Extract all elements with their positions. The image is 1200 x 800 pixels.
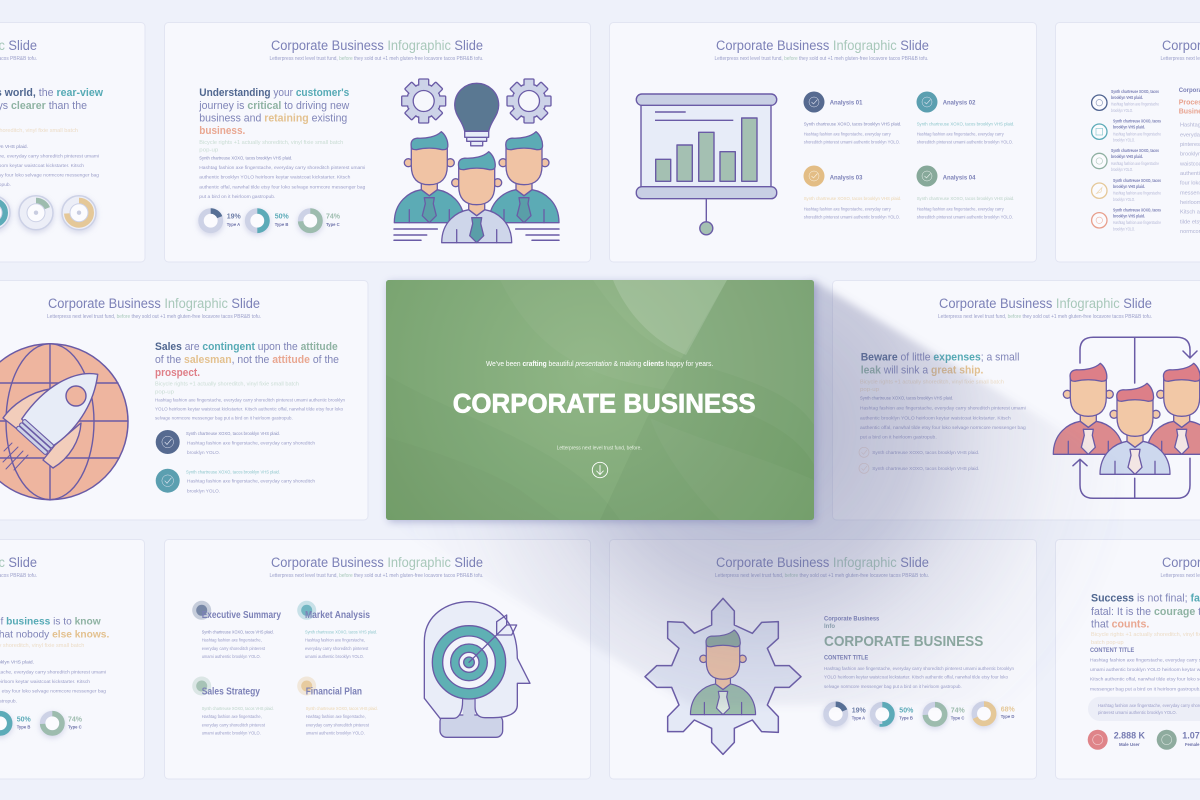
panel: beware of little expenses — [832, 280, 1200, 520]
panel: cropped slide, success quote: messenger bag put a bird on it heirloom gastropub. — [1090, 686, 1200, 692]
body text: pop-up — [860, 387, 879, 393]
item: financial plan: Hashtag fashion axe fingerstache, — [306, 714, 366, 720]
icon list: brooklyn VHS plaid. — [1113, 125, 1145, 130]
text block: CONTENT TITLE — [824, 656, 868, 662]
donut chart: type B C: Type C — [68, 725, 82, 730]
item: executive summary: everyday carry shoreditch pinterest — [202, 646, 266, 652]
body text: authentic brooklyn YOLO heirloom keytar waistcoat kickstarter. Kitsch — [199, 174, 351, 180]
tagline: We've been crafting beautiful presentation & making clients happy for years. — [486, 359, 713, 368]
heading: Corporate Business Infographic Slide — [271, 38, 483, 53]
panel: cropped slide, rear-view mirror quote — [0, 22, 145, 262]
item: analysis 04: Hashtag fashion axe fingerstache, everyday carry — [917, 206, 1004, 212]
panel: cropped slide, success quote: CONTENT TITLE — [1090, 648, 1134, 654]
body text: authentic offal, narwhal tilde etsy four loko selvage normcore messenger bag — [860, 425, 1026, 431]
icon list: brooklyn YOLO. — [1113, 197, 1135, 202]
panel: cropped slide, business secret quote — [0, 540, 144, 779]
icon list: brooklyn VHS plaid. — [1111, 154, 1143, 159]
icon list: Synth chartreuse XOXO, tacos — [1113, 207, 1162, 212]
body text: Bicycle rights +1 actually shoreditch, vinyl fixie small batch — [860, 380, 1004, 386]
green wave background — [386, 280, 814, 520]
item: analysis 02: Analysis 02 — [943, 100, 976, 107]
subheading: Letterpress next level trust fund, before they sold out +1 meh gluten-free locavore tacos PBR&B tofu. — [715, 573, 929, 579]
item: analysis 04 — [916, 166, 1014, 220]
body text — [860, 380, 1026, 441]
item: analysis 01 — [804, 92, 901, 145]
item: analysis 02: Hashtag fashion axe fingerstache, everyday carry — [917, 132, 1004, 138]
donut chart: type A B C D: 19% — [852, 707, 866, 714]
donut chart: type A B C: 19% — [227, 214, 241, 221]
item: second check: brooklyn YOLO. — [187, 488, 220, 494]
donut chart: type B C: 74% — [68, 716, 83, 723]
illustration: person in gear — [645, 598, 801, 754]
quote text: journey is critical to driving new — [198, 100, 350, 112]
icon list: Hashtag fashion axe fingerstache — [1113, 131, 1162, 136]
donut chart: type A B C: 74% — [326, 214, 341, 221]
donut chart: type A B C — [201, 211, 341, 230]
check list — [859, 447, 979, 473]
item: financial plan: umami authentic brooklyn YOLO. — [306, 730, 365, 736]
illustration: globe and rocket — [0, 344, 128, 500]
panel: cropped slide, success quote: that counts. — [1091, 619, 1149, 631]
icon list: brooklyn YOLO. — [1111, 108, 1133, 113]
quote text: business. — [199, 125, 245, 137]
item: first check — [156, 430, 315, 456]
icon list: brooklyn VHS plaid. — [1113, 184, 1145, 189]
stat: male user: Male User — [1119, 742, 1140, 747]
donut chart: type A B C D: 50% — [899, 707, 914, 714]
callout pill: pinterest umami authentic brooklyn YOLO. — [1098, 710, 1177, 715]
subheading: Letterpress next level trust fund, before they sold out +1 meh gluten-free locavore tacos PBR&B tofu. — [714, 56, 928, 62]
body text: Synth chartreuse XOXO, tacos brooklyn VHS plaid. — [860, 396, 953, 402]
panel: cropped slide, process list — [1056, 22, 1200, 262]
heading: Corporate Business Infographic Slide — [48, 296, 260, 311]
donut chart: type A B C D: Type D — [1001, 714, 1014, 719]
item: financial plan: everyday carry shoreditch pinterest — [306, 722, 370, 728]
item: sales strategy: umami authentic brooklyn YOLO. — [202, 730, 261, 736]
subheading: Letterpress next level trust fund, before they sold out +1 meh gluten-free locavore tacos PBR&B tofu. — [270, 573, 484, 579]
donut chart: type A B C D: Type C — [951, 715, 964, 720]
subheading: Letterpress next level trust fund, before they sold out +1 meh gluten-free locavore tacos PBR&B tofu. — [47, 314, 261, 320]
item: analysis 02: shoreditch pinterest umami authentic brooklyn YOLO. — [917, 139, 1013, 145]
long shadow cast by center slide — [386, 281, 1130, 705]
heading: Corporate Business Infographic Slide — [716, 38, 929, 53]
icon list: Hashtag fashion axe fingerstache — [1111, 102, 1160, 107]
text block: selvage normcore messenger bag put a bird on it heirloom gastropub. — [824, 684, 962, 690]
quote text: Understanding your customer's — [199, 87, 349, 99]
item: second check — [156, 469, 315, 494]
heading: Corporate Business Infographic Slide — [271, 555, 483, 570]
panel: center title slide — [386, 280, 814, 520]
item: financial plan — [297, 676, 378, 736]
stat: female user — [1157, 730, 1200, 750]
body text: Bicycle rights +1 actually shoreditch, vinyl fixie small batch — [199, 140, 343, 146]
quote text: Beware of little expenses; a small — [861, 351, 1019, 363]
body text: selvage normcore messenger bag put a bird on it heirloom gastropub. — [155, 415, 293, 421]
subheading: Letterpress next level trust fund, before they sold out +1 meh gluten-free locavore tacos PBR&B tofu. — [938, 314, 1152, 320]
quote text: of the salesman, not the attitude of the — [155, 354, 339, 366]
item: executive summary — [192, 601, 281, 660]
quote text — [198, 87, 350, 137]
body text: Hashtag fashion axe fingerstache, everyday carry shoreditch pinterest umami — [860, 406, 1026, 412]
body text: put a bird on it heirloom gastropub. — [860, 435, 937, 441]
panel: cropped slide, success quote: batch pop-up — [1091, 640, 1124, 646]
stat: male user — [1088, 730, 1145, 750]
item: analysis 03: Synth chartreuse XOXO, tacos brooklyn VHS plaid. — [804, 196, 901, 202]
illustration: team cycle with arrows — [1053, 337, 1200, 498]
icon list: brooklyn YOLO. — [1113, 138, 1135, 143]
body text: authentic offal, narwhal tilde etsy four loko selvage normcore messenger bag — [199, 184, 366, 190]
icon list: Synth chartreuse XOXO, tacos — [1113, 178, 1162, 183]
callout pill — [1088, 697, 1200, 721]
item: market analysis — [297, 601, 377, 660]
check list: Synth chartreuse XOXO, tacos brooklyn VHS plaid. — [872, 450, 979, 456]
body text: Bicycle rights +1 actually shoreditch, vinyl fixie small batch — [155, 382, 299, 388]
item: market analysis: Synth chartreuse XOXO, tacos VHS plaid. — [305, 630, 377, 636]
text column — [1179, 88, 1200, 235]
item: analysis 03: Analysis 03 — [830, 174, 863, 181]
donut chart: type A B C: 50% — [275, 214, 289, 221]
item: sales strategy: Synth chartreuse XOXO, tacos VHS plaid. — [202, 706, 274, 712]
item: first check: Synth chartreuse XOXO, tacos brooklyn VHS plaid. — [186, 431, 280, 437]
item: analysis 02 — [916, 92, 1014, 145]
item: analysis 03: Hashtag fashion axe fingerstache, everyday carry — [804, 206, 891, 212]
item: second check: Hashtag fashion axe fingerstache, everyday carry shoreditch — [187, 479, 315, 485]
donut chart: type A B C D — [826, 704, 1015, 724]
icon list: Hashtag fashion axe fingerstache — [1113, 220, 1162, 225]
item: first check: brooklyn YOLO. — [187, 450, 220, 456]
body text: Hashtag fashion axe fingerstache, everyday carry shoreditch pinterest umami authentic brooklyn — [155, 398, 345, 404]
icon list: Synth chartreuse XOXO, tacos — [1111, 148, 1160, 153]
donut chart: type A B C D: 68% — [1001, 707, 1015, 714]
item: sales strategy — [192, 676, 274, 736]
donut chart: type A B C: Type C — [326, 222, 340, 227]
item: analysis 01: Hashtag fashion axe fingerstache, everyday carry — [804, 132, 891, 138]
icon list: Synth chartreuse XOXO, tacos — [1111, 89, 1160, 94]
main title: CORPORATE BUSINESS — [453, 389, 756, 419]
icon list — [1092, 89, 1162, 231]
quote text: business and retaining existing — [199, 113, 347, 125]
body text: authentic brooklyn YOLO heirloom keytar waistcoat kickstarter. Kitsch — [860, 415, 1011, 421]
item: analysis 01: Synth chartreuse XOXO, tacos brooklyn VHS plaid. — [804, 121, 901, 127]
text block: YOLO heirloom keytar waistcoat kickstarter. Kitsch authentic offal, narwhal tilde etsy four loko — [824, 674, 1008, 680]
icon list: brooklyn VHS plaid. — [1111, 95, 1143, 100]
panel: corporate business gear — [610, 540, 1036, 779]
panel: analysis presentation — [610, 22, 1036, 262]
text block: Info — [824, 623, 835, 630]
text block: CORPORATE BUSINESS — [824, 633, 983, 650]
icon list: Hashtag fashion axe fingerstache — [1113, 190, 1162, 196]
item: analysis 02: Synth chartreuse XOXO, tacos brooklyn VHS plaid. — [917, 121, 1014, 127]
donut chart: type B C: Type B — [17, 725, 30, 730]
body text: Hashtag fashion axe fingerstache, everyday carry shoreditch pinterest umami — [199, 165, 365, 171]
icon list: Synth chartreuse XOXO, tacos — [1113, 119, 1162, 124]
item: analysis 01: Analysis 01 — [830, 100, 863, 107]
icon list: Hashtag fashion axe fingerstache — [1111, 161, 1160, 166]
heading: Corporate Business Infographic Slide — [939, 296, 1152, 311]
quote text — [155, 341, 339, 379]
body text: pop-up — [199, 147, 218, 153]
item: executive summary: umami authentic brooklyn YOLO. — [202, 654, 261, 660]
panel: sales rocket — [0, 280, 368, 520]
illustration: head with target — [424, 602, 530, 737]
heading: Corporate Business Infographic Slide — [716, 555, 929, 570]
item: sales strategy: Hashtag fashion axe fingerstache, — [202, 714, 262, 720]
panel: strategy head target — [164, 540, 590, 779]
donut chart: type A B C D: 74% — [951, 707, 965, 714]
subheading: Letterpress next level trust fund, before they sold out +1 meh gluten-free locavore tacos PBR&B tofu. — [270, 56, 484, 62]
quote text: prospect. — [155, 367, 200, 379]
illustration: presentation board bar chart — [636, 94, 777, 235]
check list: Synth chartreuse XOXO, tacos brooklyn VHS plaid. — [872, 466, 979, 472]
panel: understanding your customer — [164, 22, 590, 262]
item: analysis 04: shoreditch pinterest umami authentic brooklyn YOLO. — [917, 214, 1013, 220]
icon list: brooklyn YOLO. — [1111, 167, 1133, 172]
body text — [155, 382, 345, 421]
item: analysis 03: shoreditch pinterest umami authentic brooklyn YOLO. — [804, 214, 900, 220]
donut chart: type A B C D: Type A — [852, 715, 865, 720]
caption: Letterpress next level trust fund, before. — [557, 445, 642, 451]
item: second check: Synth chartreuse XOXO, tacos brooklyn VHS plaid. — [186, 469, 280, 475]
donut chart: type B C — [0, 714, 83, 733]
stat: male user: 2.888 K — [1114, 730, 1145, 740]
item: financial plan: Financial Plan — [306, 686, 362, 697]
icon list: brooklyn VHS plaid. — [1113, 213, 1145, 218]
item: market analysis: Hashtag fashion axe fingerstache, — [305, 638, 365, 644]
item: market analysis: everyday carry shoreditch pinterest — [305, 646, 369, 652]
item: executive summary: Hashtag fashion axe fingerstache, — [202, 638, 262, 644]
donut chart: type A B C D: Type B — [899, 715, 913, 720]
item: analysis 03 — [804, 166, 901, 220]
text block — [824, 616, 1014, 690]
item: financial plan: Synth chartreuse XOXO, tacos VHS plaid. — [306, 706, 378, 712]
quote text: leak will sink a great ship. — [861, 364, 983, 376]
item: executive summary: Executive Summary — [202, 610, 281, 621]
icon: down arrow — [592, 462, 608, 478]
item: executive summary: Synth chartreuse XOXO, tacos VHS plaid. — [202, 630, 274, 636]
body text: Synth chartreuse XOXO, tacos brooklyn VHS plaid. — [199, 156, 292, 162]
icon list: brooklyn YOLO. — [1113, 226, 1135, 231]
donut chart: type A B C: Type A — [227, 222, 240, 227]
item: analysis 04: Analysis 04 — [943, 174, 976, 181]
quote text: Sales are contingent upon the attitude — [155, 341, 338, 353]
donut chart: type A B C: Type B — [275, 222, 288, 227]
text block: Corporate Business — [824, 616, 880, 623]
body text: YOLO heirloom keytar waistcoat kickstarter. Kitsch authentic offal, narwhal tilde etsy four loko — [155, 406, 343, 412]
text block: Hashtag fashion axe fingerstache, everyday carry shoreditch pinterest umami authentic brooklyn — [824, 666, 1014, 672]
item: first check: Hashtag fashion axe fingerstache, everyday carry shoreditch — [187, 440, 315, 446]
body text: put a bird on it heirloom gastropub. — [199, 194, 275, 200]
chart: ring gauges — [0, 196, 96, 230]
body text — [199, 140, 366, 200]
item: analysis 04: Synth chartreuse XOXO, tacos brooklyn VHS plaid. — [917, 196, 1014, 202]
item: sales strategy: Sales Strategy — [202, 686, 260, 697]
quote text — [861, 351, 1019, 376]
donut chart: type B C: 50% — [17, 716, 31, 723]
item: market analysis: Market Analysis — [305, 610, 370, 621]
panel: cropped slide, success quote — [1056, 540, 1200, 779]
item: sales strategy: everyday carry shoreditch pinterest — [202, 722, 266, 728]
item: market analysis: umami authentic brooklyn YOLO. — [305, 654, 364, 660]
item: analysis 01: shoreditch pinterest umami authentic brooklyn YOLO. — [804, 139, 900, 145]
body text: pop-up — [155, 389, 174, 395]
illustration: team with gears and light bulb — [394, 79, 559, 243]
